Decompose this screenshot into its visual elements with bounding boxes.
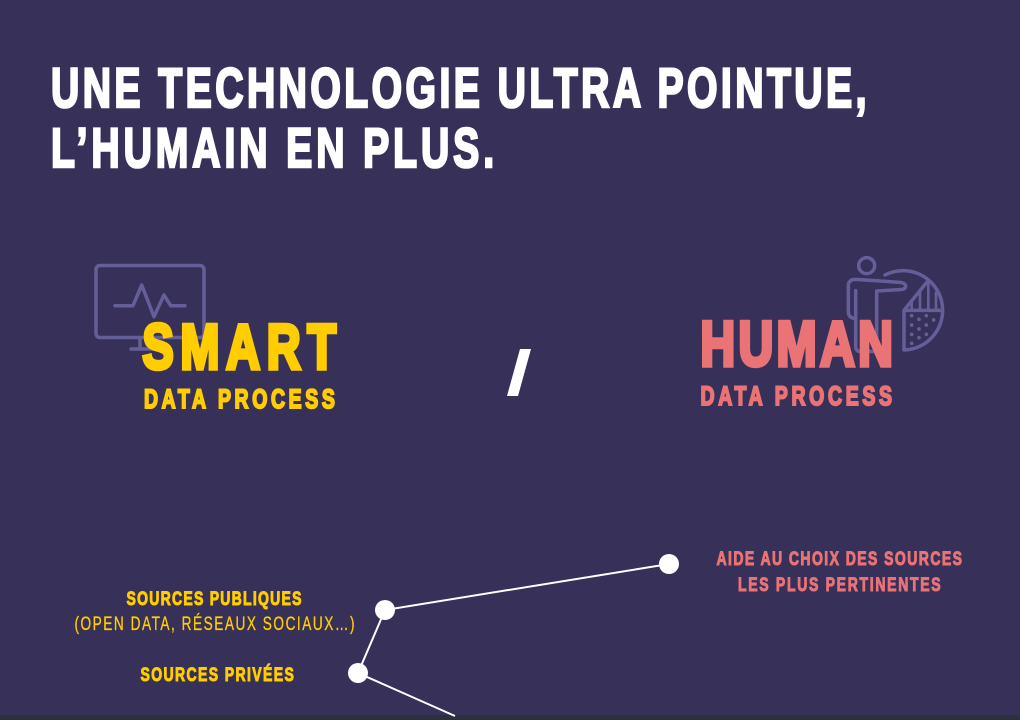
label: sources publiques: (OPEN DATA, RÉSEAUX SOCIAUX…) bbox=[74, 613, 355, 635]
heading: human data process: HUMAN bbox=[700, 308, 893, 379]
label: aide au choix des sources bbox=[716, 548, 962, 596]
icon: monitor with pulse bbox=[96, 266, 204, 349]
slash separator bbox=[507, 349, 531, 396]
label: sources publiques: SOURCES PUBLIQUES bbox=[126, 588, 301, 610]
heading: smart data process: DATA PROCESS bbox=[144, 384, 335, 414]
heading: smart data process: SMART bbox=[142, 312, 336, 382]
label: sources publiques bbox=[74, 588, 355, 635]
label: sources privées: SOURCES PRIVÉES bbox=[140, 664, 294, 686]
title: UNE TECHNOLOGIE ULTRA POINTUE, bbox=[51, 57, 866, 120]
connector network bbox=[348, 554, 679, 716]
title bbox=[51, 57, 866, 180]
icon: person presenting pie chart bbox=[848, 258, 943, 352]
heading: human data process: DATA PROCESS bbox=[700, 381, 892, 411]
label: aide au choix des sources: LES PLUS PERTINENTES bbox=[738, 574, 941, 596]
heading: human data process bbox=[700, 308, 893, 411]
label: aide au choix des sources: AIDE AU CHOIX DES SOURCES bbox=[716, 548, 962, 570]
heading: smart data process bbox=[142, 312, 336, 414]
title: L’HUMAIN EN PLUS. bbox=[51, 117, 494, 180]
